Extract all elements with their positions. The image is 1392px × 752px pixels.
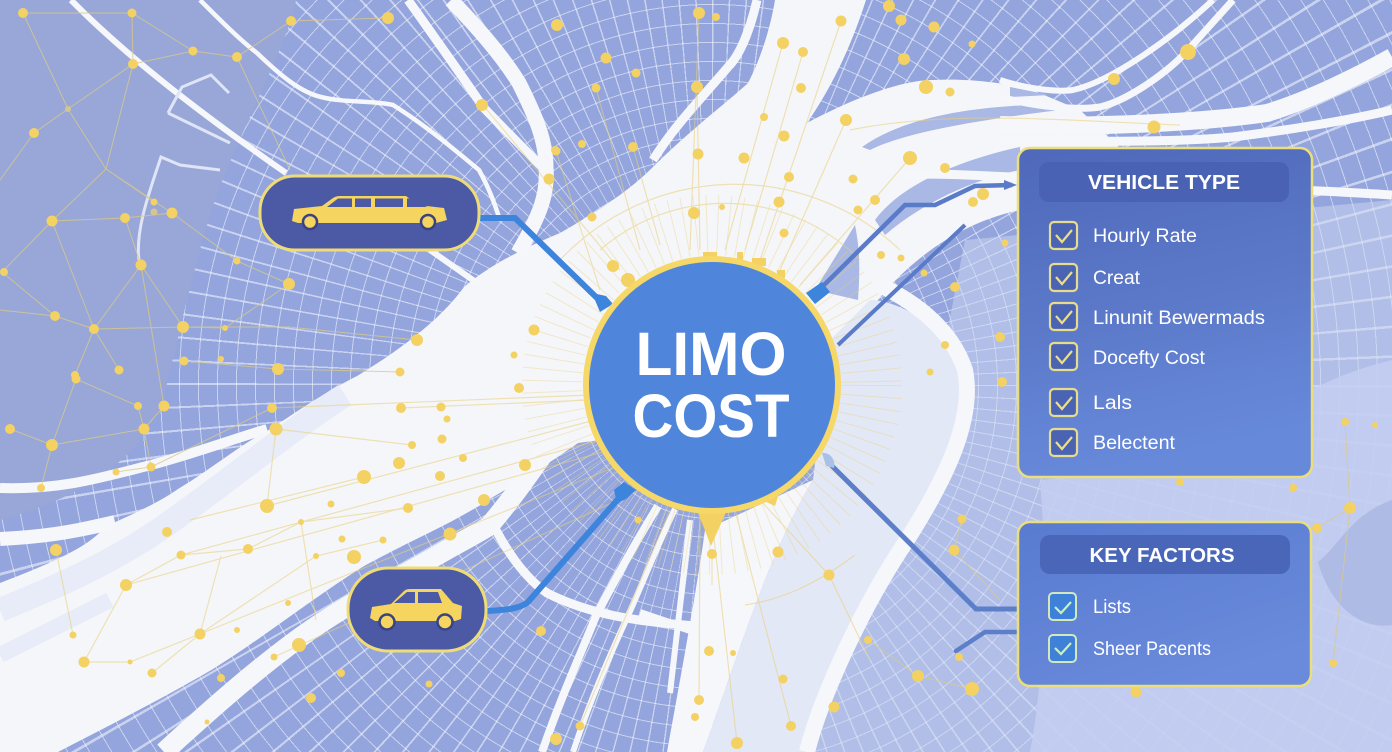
icon: limousine	[292, 196, 447, 229]
header: key factors	[1040, 535, 1290, 574]
top-left plain region	[0, 0, 296, 520]
panel: vehicle type	[1018, 148, 1312, 477]
connector: limo to hub	[480, 218, 613, 312]
central hub: LIMO	[636, 320, 786, 388]
lower right pale region	[805, 200, 1392, 752]
central hub: COST	[632, 382, 790, 450]
checklist: vehicle type	[1050, 222, 1265, 456]
checklist: vehicle type: Creat	[1093, 268, 1141, 289]
checklist: key factors: Sheer Pacents	[1093, 639, 1211, 660]
header: vehicle type	[1039, 162, 1289, 202]
checklist: vehicle type: Lals	[1093, 393, 1132, 414]
checklist: key factors: Lists	[1093, 597, 1131, 618]
checklist: key factors	[1049, 593, 1211, 662]
hub ring bumps	[621, 252, 785, 546]
connector: hub to key factors panel	[822, 453, 1034, 651]
checklist: vehicle type: Linunit Bewermads	[1093, 308, 1265, 329]
connector: hub to vehicle type panel	[806, 180, 1017, 345]
connector: car to hub	[487, 482, 636, 611]
yellow radial rays	[56, 13, 1180, 743]
limo pill	[260, 176, 479, 250]
header: vehicle type: VEHICLE TYPE	[1088, 172, 1240, 194]
central hub	[586, 252, 838, 546]
header: key factors: KEY FACTORS	[1090, 545, 1234, 567]
checklist: vehicle type: Docefty Cost	[1093, 348, 1206, 369]
panel: key factors	[1018, 522, 1311, 686]
icon: car	[370, 589, 462, 630]
checklist: vehicle type: Belectent	[1093, 433, 1176, 454]
checklist: vehicle type: Hourly Rate	[1093, 226, 1197, 247]
car pill	[348, 568, 486, 651]
